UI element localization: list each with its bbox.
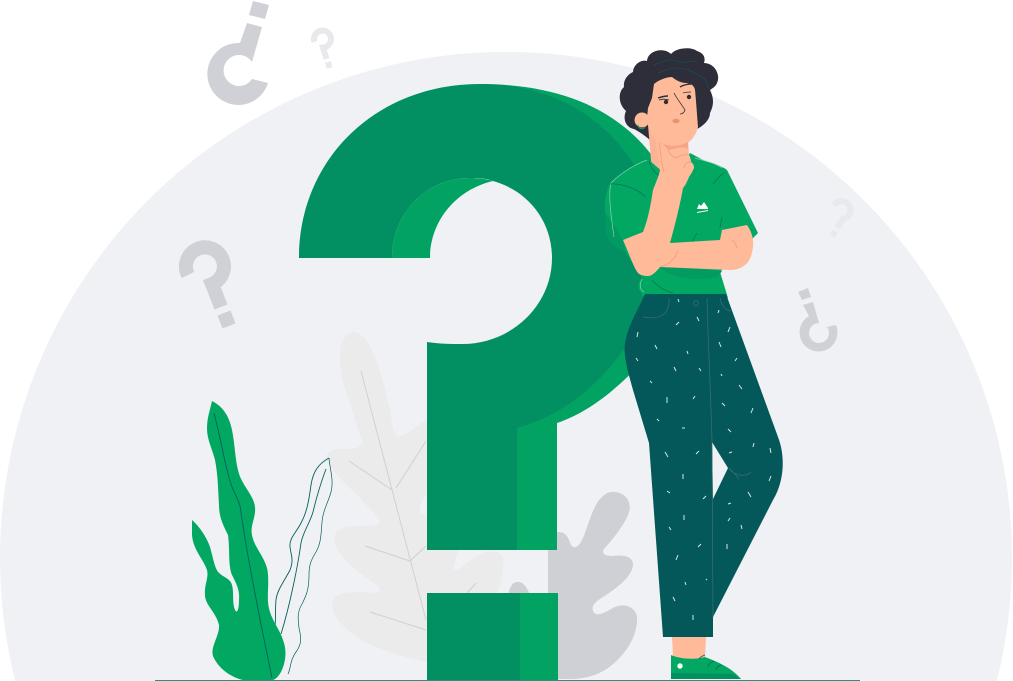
- icon: faint question mark right: [832, 201, 850, 236]
- shoe: [671, 655, 741, 679]
- shirt waist shadow: [658, 266, 722, 279]
- pale leaf: [327, 332, 503, 680]
- face details: [658, 84, 691, 123]
- leg skin: [672, 637, 706, 661]
- question mark: side face: [480, 84, 680, 550]
- pants speckles: [636, 299, 771, 620]
- hair curl: [654, 60, 708, 88]
- person: [605, 48, 783, 679]
- chin shadow: [660, 142, 688, 150]
- icon: small faint question mark top: [314, 31, 331, 68]
- question mark: front face: [299, 84, 654, 550]
- ear: [634, 112, 650, 129]
- question mark: inner crescent: [392, 178, 493, 258]
- pants: [625, 294, 783, 637]
- grey leaf: [508, 492, 637, 679]
- icon: grey inverted question mark right: [798, 288, 838, 351]
- shirt: [605, 153, 758, 298]
- ground line: [155, 680, 860, 681]
- question mark: dot: [427, 593, 558, 681]
- neck: [648, 125, 690, 172]
- hair: [620, 48, 718, 140]
- plant: green leaf: [192, 401, 285, 680]
- face: [647, 77, 698, 147]
- plant: outlined leaf: [275, 458, 332, 674]
- finger shading: [659, 138, 737, 267]
- shirt logo: [697, 202, 708, 213]
- arms: [623, 133, 753, 276]
- icon: grey inverted question mark top: [207, 1, 269, 105]
- icon: grey question mark left: [186, 247, 229, 326]
